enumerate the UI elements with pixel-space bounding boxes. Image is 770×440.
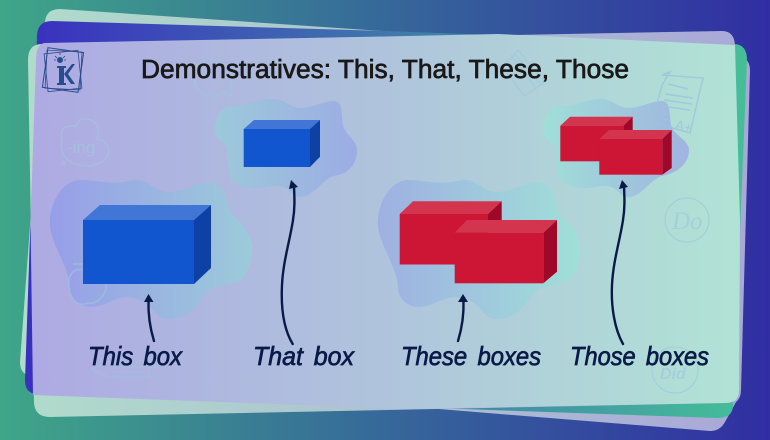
boxes: those boxes bbox=[560, 117, 672, 175]
label: this box: This box bbox=[88, 341, 183, 371]
watermark: graded paper bbox=[652, 72, 703, 136]
watermark: pencil bbox=[92, 361, 155, 377]
watermark: -ing cloud bbox=[61, 119, 108, 166]
watermark: Did circle: Did bbox=[660, 366, 687, 383]
blob: that box bbox=[215, 99, 357, 197]
watermark: documents bbox=[503, 50, 545, 96]
label: those boxes: Those boxes bbox=[570, 341, 709, 371]
blob: this box bbox=[50, 180, 252, 319]
watermark: Do circle bbox=[665, 198, 709, 242]
blob: these boxes bbox=[378, 180, 580, 319]
main card face bbox=[30, 34, 740, 409]
arrow: this box bbox=[144, 294, 154, 341]
watermark: -ing cloud: -ing bbox=[67, 138, 95, 157]
label: that box: That box bbox=[253, 341, 355, 371]
watermark: speech bubble bbox=[194, 59, 231, 97]
box: this box bbox=[83, 205, 211, 284]
watermark: Did circle bbox=[652, 347, 698, 393]
watermark: apple bbox=[69, 264, 106, 304]
watermark: Do circle: Do bbox=[671, 208, 703, 235]
title: Demonstratives: This, That, These, Those bbox=[141, 56, 629, 84]
boxes: these boxes bbox=[400, 201, 557, 283]
box: that box bbox=[244, 120, 320, 167]
arrow: that box bbox=[282, 180, 298, 344]
watermark: graded paper: A+ bbox=[673, 116, 694, 136]
logo bbox=[42, 48, 84, 92]
arrow: these boxes bbox=[458, 294, 468, 341]
label: these boxes: These boxes bbox=[401, 341, 541, 371]
arrow: those boxes bbox=[612, 180, 628, 344]
blob: those boxes bbox=[543, 99, 689, 197]
